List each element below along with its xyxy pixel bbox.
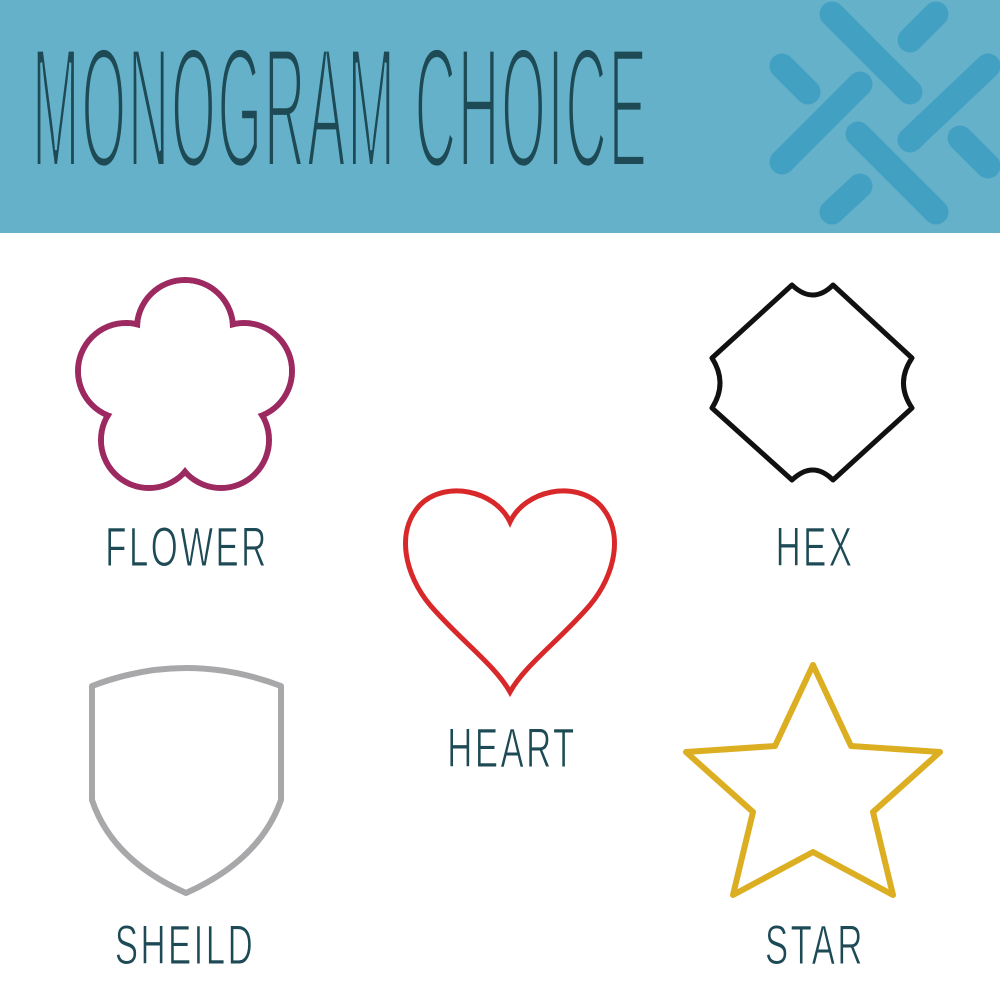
header banner [0,0,1000,233]
icon: shield [92,668,281,893]
label: heart: HEART [447,716,577,779]
icon: heart [406,491,614,692]
label: hex: HEX [776,515,854,578]
label: star: STAR [765,913,865,976]
icon: flower [78,280,292,488]
label: flower: FLOWER [105,515,269,578]
icon: star [686,665,940,895]
icon: hex [712,285,912,480]
logo: woven bars [770,2,1000,224]
title: MONOGRAM CHOICE [32,12,649,204]
label: sheild: SHEILD [115,913,255,976]
